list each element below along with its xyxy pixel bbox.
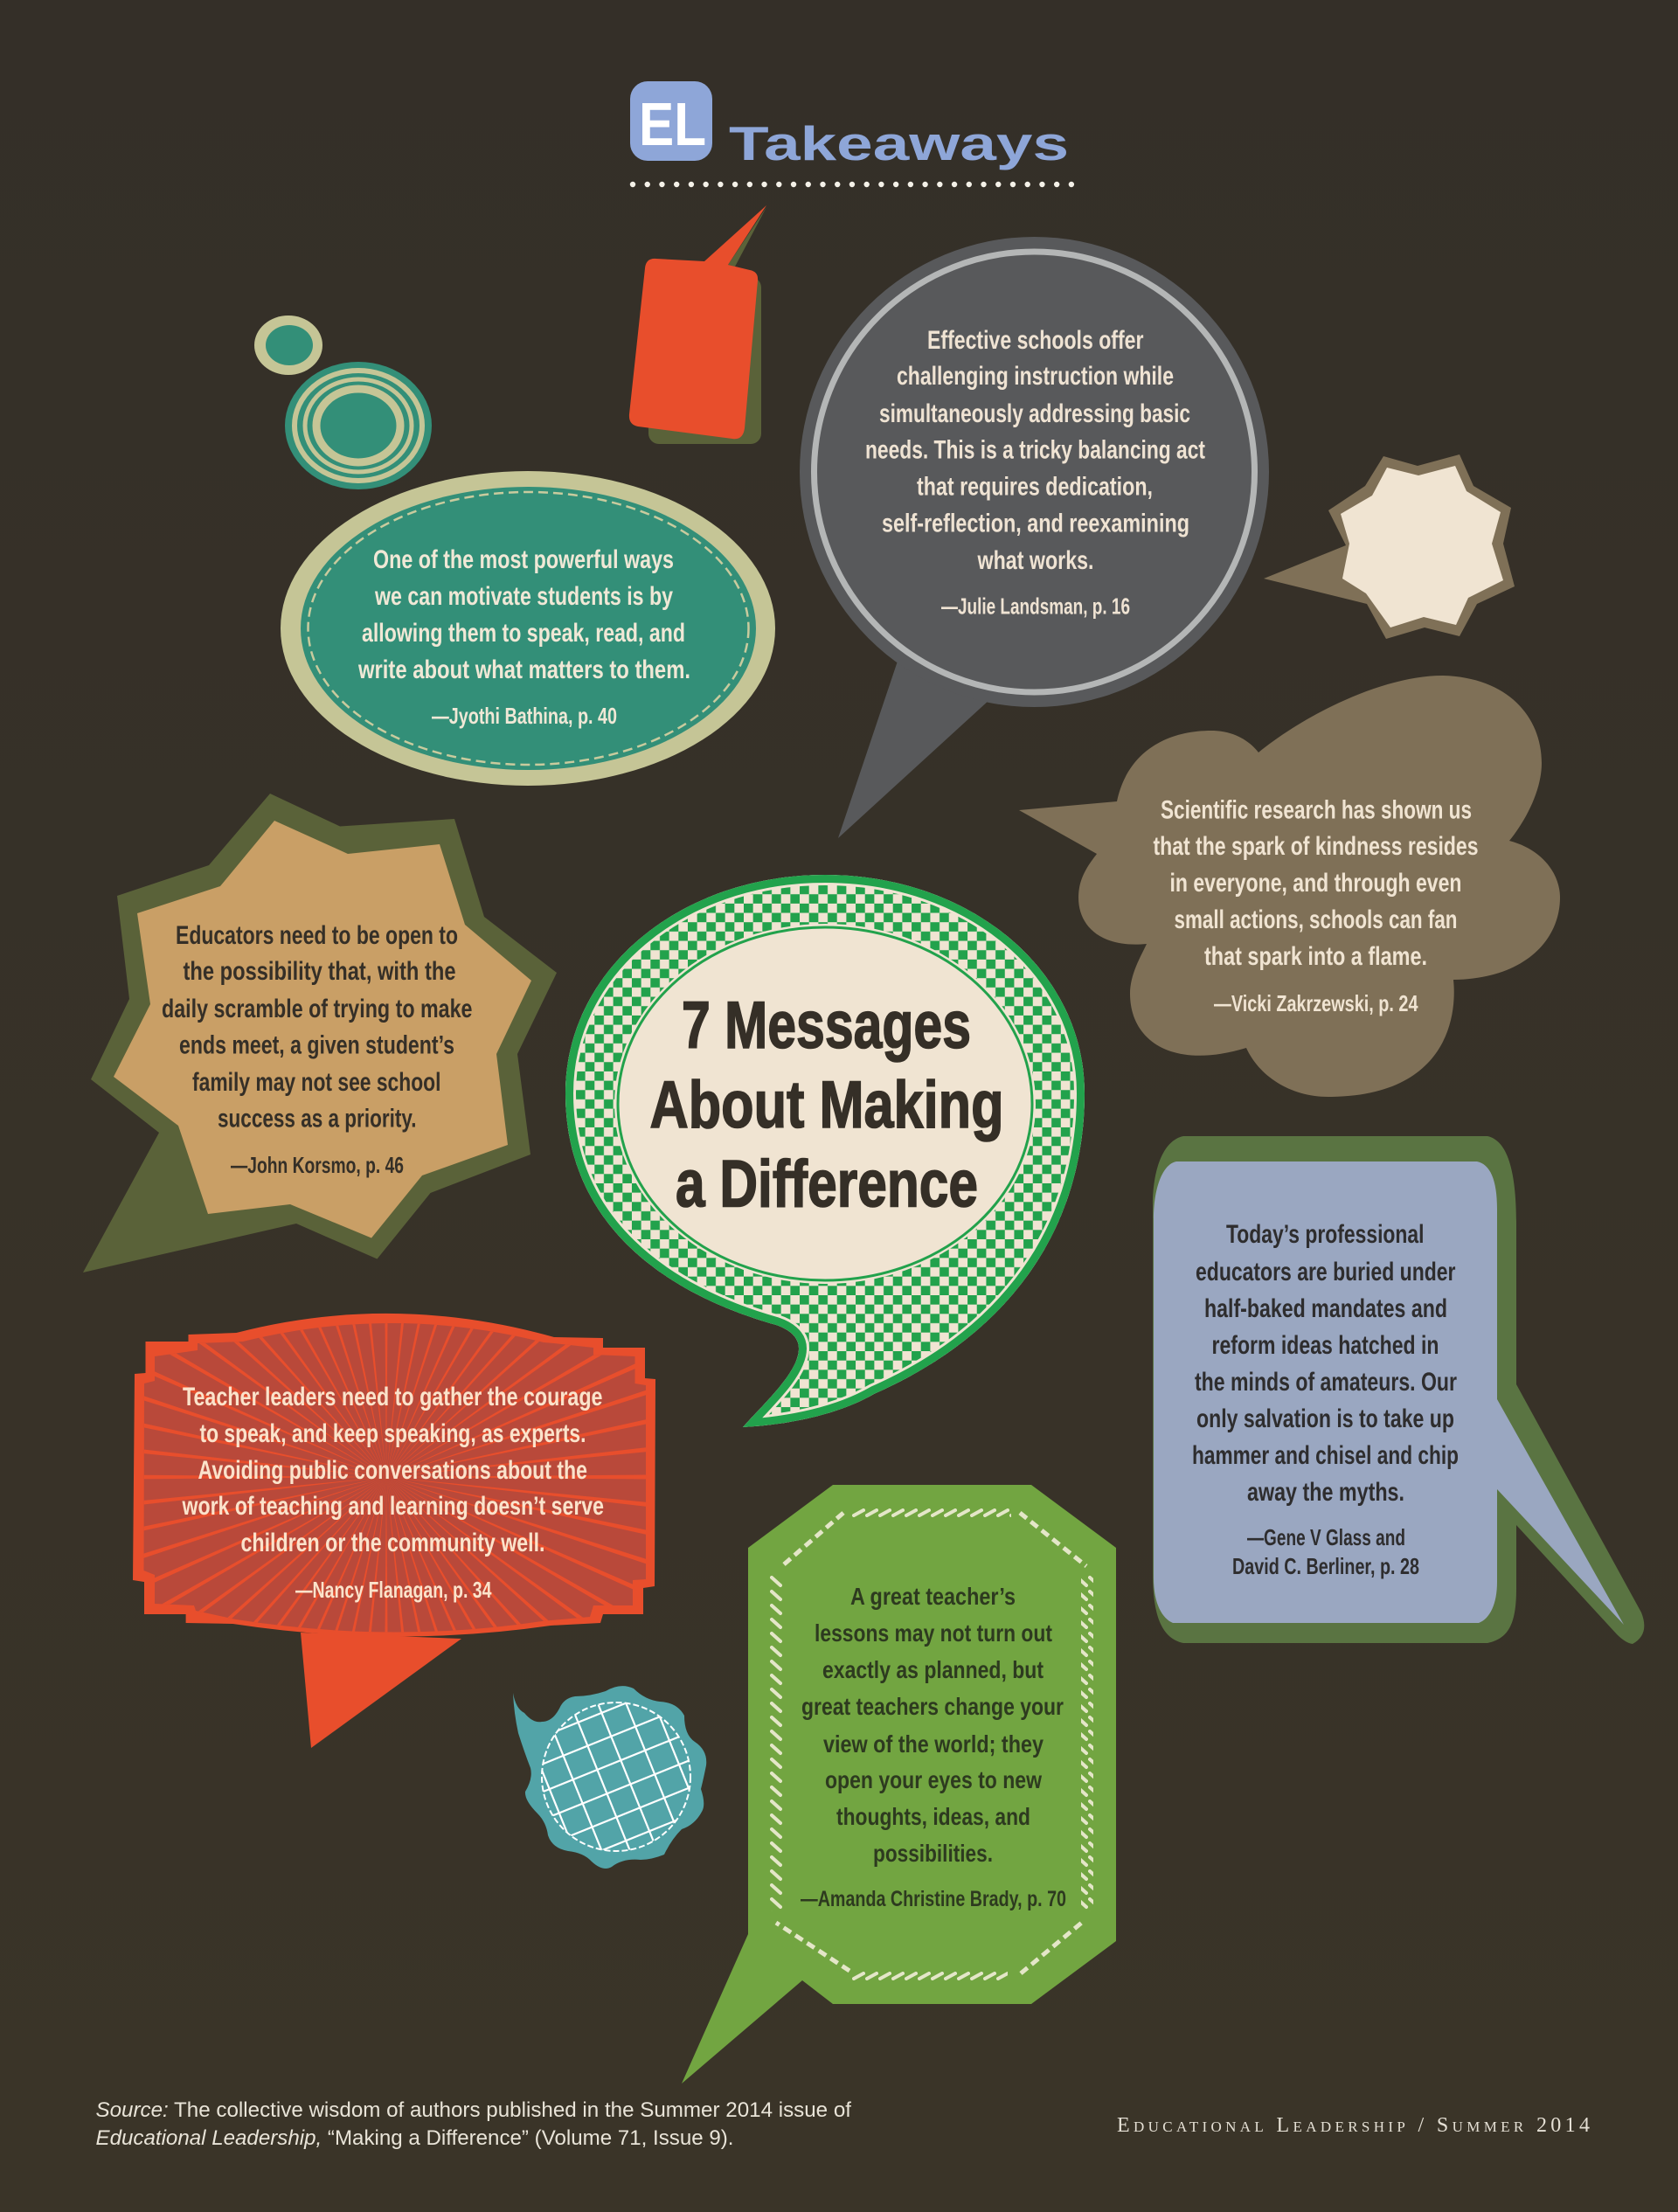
text: Glass and Berliner quote: Today’s professional xyxy=(1226,1220,1425,1249)
text: Amanda Christine Brady quote: great teachers change your xyxy=(801,1693,1064,1720)
text: Julie Landsman quote: self-reflection, and reexamining xyxy=(882,509,1189,538)
text: Jyothi Bathina quote xyxy=(357,545,690,729)
text: Jyothi Bathina quote: we can motivate students is by xyxy=(374,582,673,611)
text: Nancy Flanagan quote: Avoiding public conversations about the xyxy=(198,1456,587,1485)
text: Nancy Flanagan quote: work of teaching and learning doesn’t serve xyxy=(182,1492,604,1521)
decorative red speech bubble xyxy=(629,205,766,444)
panel: central title speech bubble xyxy=(565,875,1085,1427)
text: John Korsmo quote: —John Korsmo, p. 46 xyxy=(231,1152,404,1178)
title: 7 Messages About Making a Difference: About Making xyxy=(650,1068,1003,1142)
title: 7 Messages About Making a Difference: 7 Messages xyxy=(682,988,971,1063)
heading: Takeaways: Takeaways xyxy=(729,116,1069,170)
text: Glass and Berliner quote: only salvation is to take up xyxy=(1196,1404,1454,1433)
text: John Korsmo quote: the possibility that, with the xyxy=(184,957,456,986)
text: John Korsmo quote: daily scramble of trying to make xyxy=(162,995,472,1023)
text: Julie Landsman quote: challenging instruction while xyxy=(897,362,1174,391)
text: Glass and Berliner quote: hammer and chisel and chip xyxy=(1192,1441,1459,1470)
text: Amanda Christine Brady quote: A great teacher’s xyxy=(850,1583,1016,1610)
panel: green octagon speech bubble xyxy=(682,1485,1116,2084)
footer: source note: Source: The collective wisdom of authors published in the Summer 2014 issue of xyxy=(96,2098,851,2122)
text: Amanda Christine Brady quote: view of the world; they xyxy=(823,1730,1044,1758)
text: Julie Landsman quote: —Julie Landsman, p. 16 xyxy=(941,593,1130,619)
text: Vicki Zakrzewski quote: that spark into a flame. xyxy=(1204,942,1427,971)
text: Nancy Flanagan quote xyxy=(182,1383,604,1603)
text: Nancy Flanagan quote: children or the community well. xyxy=(241,1529,545,1557)
text: Glass and Berliner quote: away the myths. xyxy=(1247,1478,1404,1507)
decorative concentric teal circle xyxy=(285,362,432,489)
text: Amanda Christine Brady quote xyxy=(801,1583,1066,1911)
footer: source note: Educational Leadership, “Making a Difference” (Volume 71, Issue 9). xyxy=(96,2126,734,2150)
header: EL Takeaways logo xyxy=(630,81,1071,184)
text: Vicki Zakrzewski quote: —Vicki Zakrzewski, p. 24 xyxy=(1214,990,1418,1016)
text: Jyothi Bathina quote: write about what matters to them. xyxy=(357,655,690,684)
panel: blue rounded speech bubble xyxy=(1153,1136,1644,1644)
text: John Korsmo quote: family may not see school xyxy=(192,1068,440,1097)
text: Glass and Berliner quote: reform ideas hatched in xyxy=(1211,1331,1439,1360)
text: Nancy Flanagan quote: —Nancy Flanagan, p. 34 xyxy=(295,1577,492,1603)
text: Amanda Christine Brady quote: open your eyes to new xyxy=(825,1766,1042,1793)
text: Amanda Christine Brady quote: lessons may not turn out xyxy=(815,1619,1052,1647)
footer: publication line: Educational Leadership / Summer 2014 xyxy=(1117,2114,1590,2137)
text: John Korsmo quote: Educators need to be open to xyxy=(176,921,458,950)
text: Vicki Zakrzewski quote: Scientific research has shown us xyxy=(1161,795,1472,825)
decorative teal grid blob speech bubble xyxy=(513,1686,706,1869)
text: Glass and Berliner quote: educators are buried under xyxy=(1196,1258,1456,1286)
title: 7 Messages About Making a Difference: a Difference xyxy=(676,1147,978,1222)
decorative cream star speech bubble xyxy=(1264,454,1515,639)
text: Jyothi Bathina quote: —Jyothi Bathina, p. 40 xyxy=(432,703,617,729)
text: Glass and Berliner quote: David C. Berliner, p. 28 xyxy=(1232,1553,1419,1579)
icon: EL badge: EL xyxy=(639,90,706,158)
panel: tan star speech bubble xyxy=(83,794,557,1272)
text: John Korsmo quote: ends meet, a given student’s xyxy=(179,1031,454,1059)
footer: source note xyxy=(96,2098,851,2150)
text: Amanda Christine Brady quote: exactly as planned, but xyxy=(822,1656,1044,1683)
text: Julie Landsman quote: Effective schools offer xyxy=(927,326,1144,355)
text: Vicki Zakrzewski quote: small actions, schools can fan xyxy=(1175,905,1458,934)
text: Glass and Berliner quote: —Gene V Glass and xyxy=(1247,1524,1405,1550)
panel: teal oval quote xyxy=(281,471,775,786)
text: Julie Landsman quote xyxy=(865,326,1205,619)
panel: brown cloud speech bubble xyxy=(1019,676,1560,1097)
text: Amanda Christine Brady quote: —Amanda Christine Brady, p. 70 xyxy=(801,1887,1066,1911)
text: Glass and Berliner quote: half-baked mandates and xyxy=(1204,1294,1447,1323)
title: 7 Messages About Making a Difference xyxy=(650,988,1003,1222)
text: Glass and Berliner quote: the minds of amateurs. Our xyxy=(1195,1368,1457,1397)
text: Jyothi Bathina quote: allowing them to speak, read, and xyxy=(362,619,685,648)
text: Vicki Zakrzewski quote xyxy=(1154,795,1479,1016)
text: Vicki Zakrzewski quote: that the spark of kindness resides xyxy=(1154,832,1479,861)
text: Julie Landsman quote: that requires dedication, xyxy=(917,472,1153,502)
text: John Korsmo quote xyxy=(162,921,472,1178)
text: John Korsmo quote: success as a priority. xyxy=(218,1105,416,1133)
panel: gray round speech bubble xyxy=(800,237,1269,838)
text: Julie Landsman quote: needs. This is a tricky balancing act xyxy=(865,435,1205,465)
text: Julie Landsman quote: simultaneously addressing basic xyxy=(879,399,1190,428)
text: Nancy Flanagan quote: Teacher leaders need to gather the courage xyxy=(183,1383,603,1411)
text: Nancy Flanagan quote: to speak, and keep speaking, as experts. xyxy=(199,1419,586,1448)
panel: red sunburst speech bubble xyxy=(133,1313,655,1748)
text: Jyothi Bathina quote: One of the most powerful ways xyxy=(373,545,674,574)
text: Julie Landsman quote: what works. xyxy=(977,546,1094,575)
decorative small teal circle xyxy=(254,316,322,375)
text: Glass and Berliner quote xyxy=(1192,1220,1459,1579)
text: Vicki Zakrzewski quote: in everyone, and through even xyxy=(1169,869,1461,898)
text: Amanda Christine Brady quote: possibilities. xyxy=(873,1840,993,1867)
text: Amanda Christine Brady quote: thoughts, ideas, and xyxy=(836,1803,1030,1830)
